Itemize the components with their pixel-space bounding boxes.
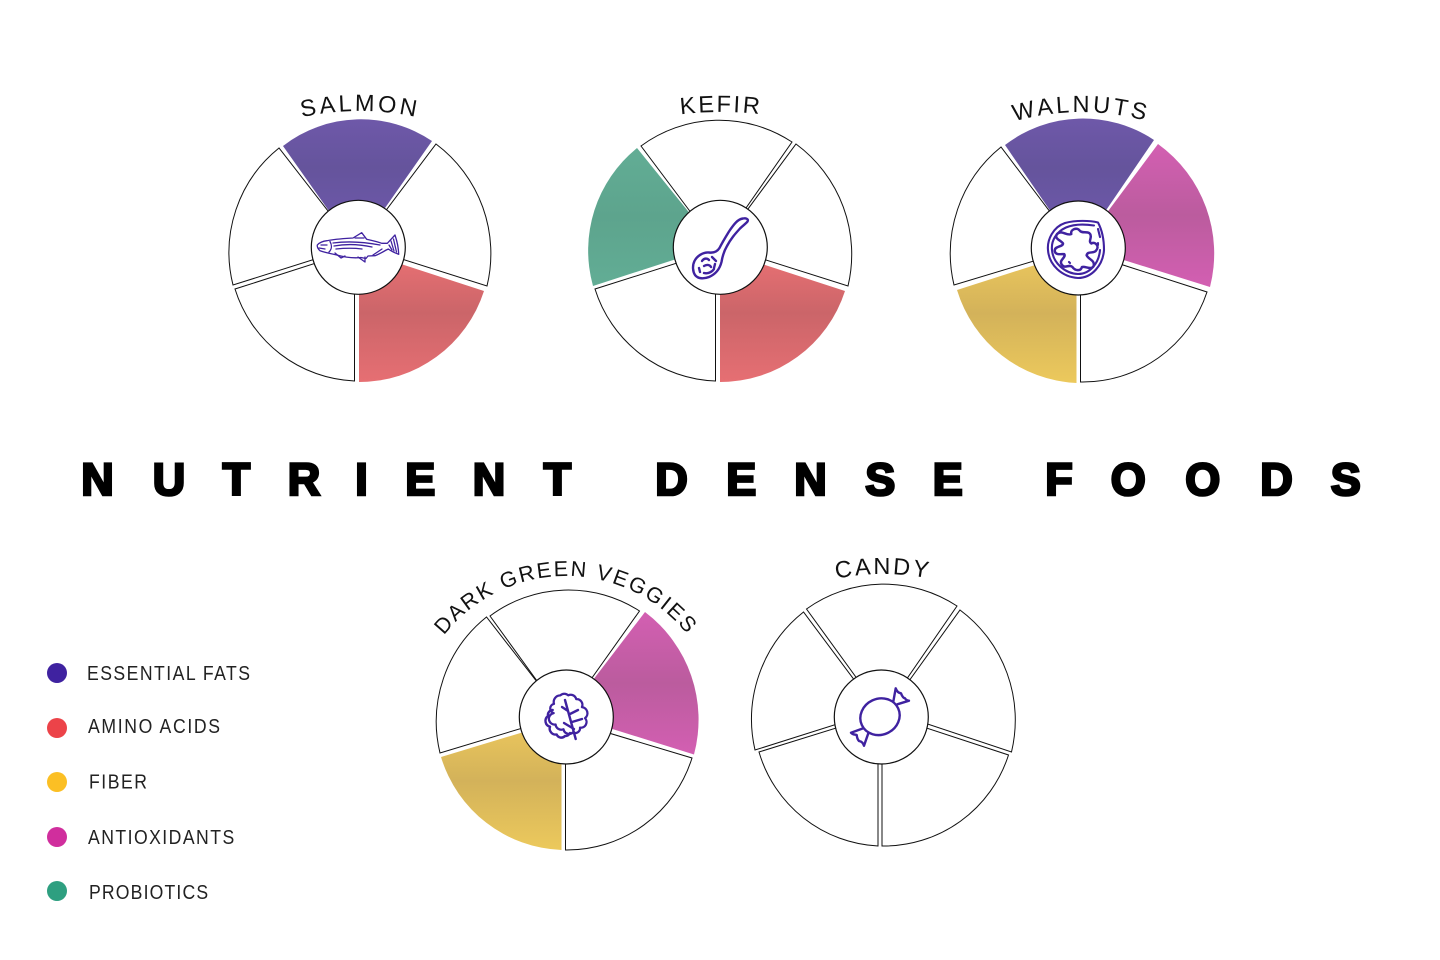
icon: fish [317, 233, 399, 262]
legend item: amino acids: AMINO ACIDS [88, 716, 220, 738]
icon: spoon [693, 218, 748, 278]
hub circle [311, 200, 405, 294]
segment: empty top [641, 120, 792, 216]
wheel: walnuts [950, 96, 1214, 383]
segments of kefir wheel [588, 120, 852, 382]
segments of walnuts wheel [950, 118, 1214, 383]
segment: empty lower right [882, 726, 1008, 846]
label: walnuts: WALNUTS [1010, 96, 1146, 120]
hub circle [834, 670, 928, 764]
label: salmon: SALMON [301, 94, 416, 116]
legend item: fiber: FIBER [89, 771, 147, 794]
segment: empty top [490, 590, 640, 685]
segment: empty lower left [235, 262, 354, 381]
legend [47, 663, 250, 904]
wheel: candy [750, 558, 1016, 846]
segment: amino acids [720, 263, 845, 382]
segment: empty upper right [383, 144, 491, 286]
segment: fiber [957, 263, 1076, 383]
segment: empty upper left [229, 148, 332, 285]
wheel: kefir [588, 96, 852, 382]
label: kefir: KEFIR [681, 96, 758, 114]
legend item: probiotics: PROBIOTICS [89, 882, 208, 904]
hub circle [1031, 201, 1125, 295]
segment: essential fats [1005, 118, 1154, 217]
icon: walnut [1048, 221, 1104, 278]
hub circle [519, 670, 613, 764]
segment: antioxidants [591, 612, 699, 754]
segments of veggies wheel [436, 590, 699, 850]
legend item: essential fats: ESSENTIAL FATS [87, 663, 250, 685]
segment: empty upper right [909, 610, 1015, 752]
wheel: dark green veggies [434, 561, 699, 850]
segment: empty lower left [595, 262, 716, 381]
legend item: antioxidants: ANTIOXIDANTS [88, 827, 234, 849]
segment: empty upper right [744, 144, 852, 286]
segment: probiotics [588, 148, 693, 286]
legend item: fiber [47, 771, 147, 794]
segment: essential fats [283, 119, 432, 216]
segment: empty lower right [1080, 264, 1207, 382]
segment: empty lower right [566, 732, 692, 850]
segment: empty upper left [752, 612, 856, 750]
icon: leaf [545, 694, 587, 739]
icon: candy [851, 688, 909, 746]
segment: amino acids [359, 263, 484, 382]
segment: empty top [806, 584, 957, 682]
segment: antioxidants [1105, 144, 1214, 287]
title: NUTRIENT DENSE FOODS [81, 454, 1361, 505]
segment: empty upper left [950, 147, 1054, 285]
hub circle [673, 200, 767, 294]
label: dark green veggies: DARK GREEN VEGGIES [434, 561, 696, 634]
label: candy: CANDY [836, 558, 930, 578]
segment: empty lower left [759, 726, 878, 846]
segments of candy wheel [752, 584, 1015, 846]
wheel: salmon [228, 94, 492, 382]
segment: empty upper left [436, 617, 539, 753]
segment: fiber [441, 731, 562, 850]
